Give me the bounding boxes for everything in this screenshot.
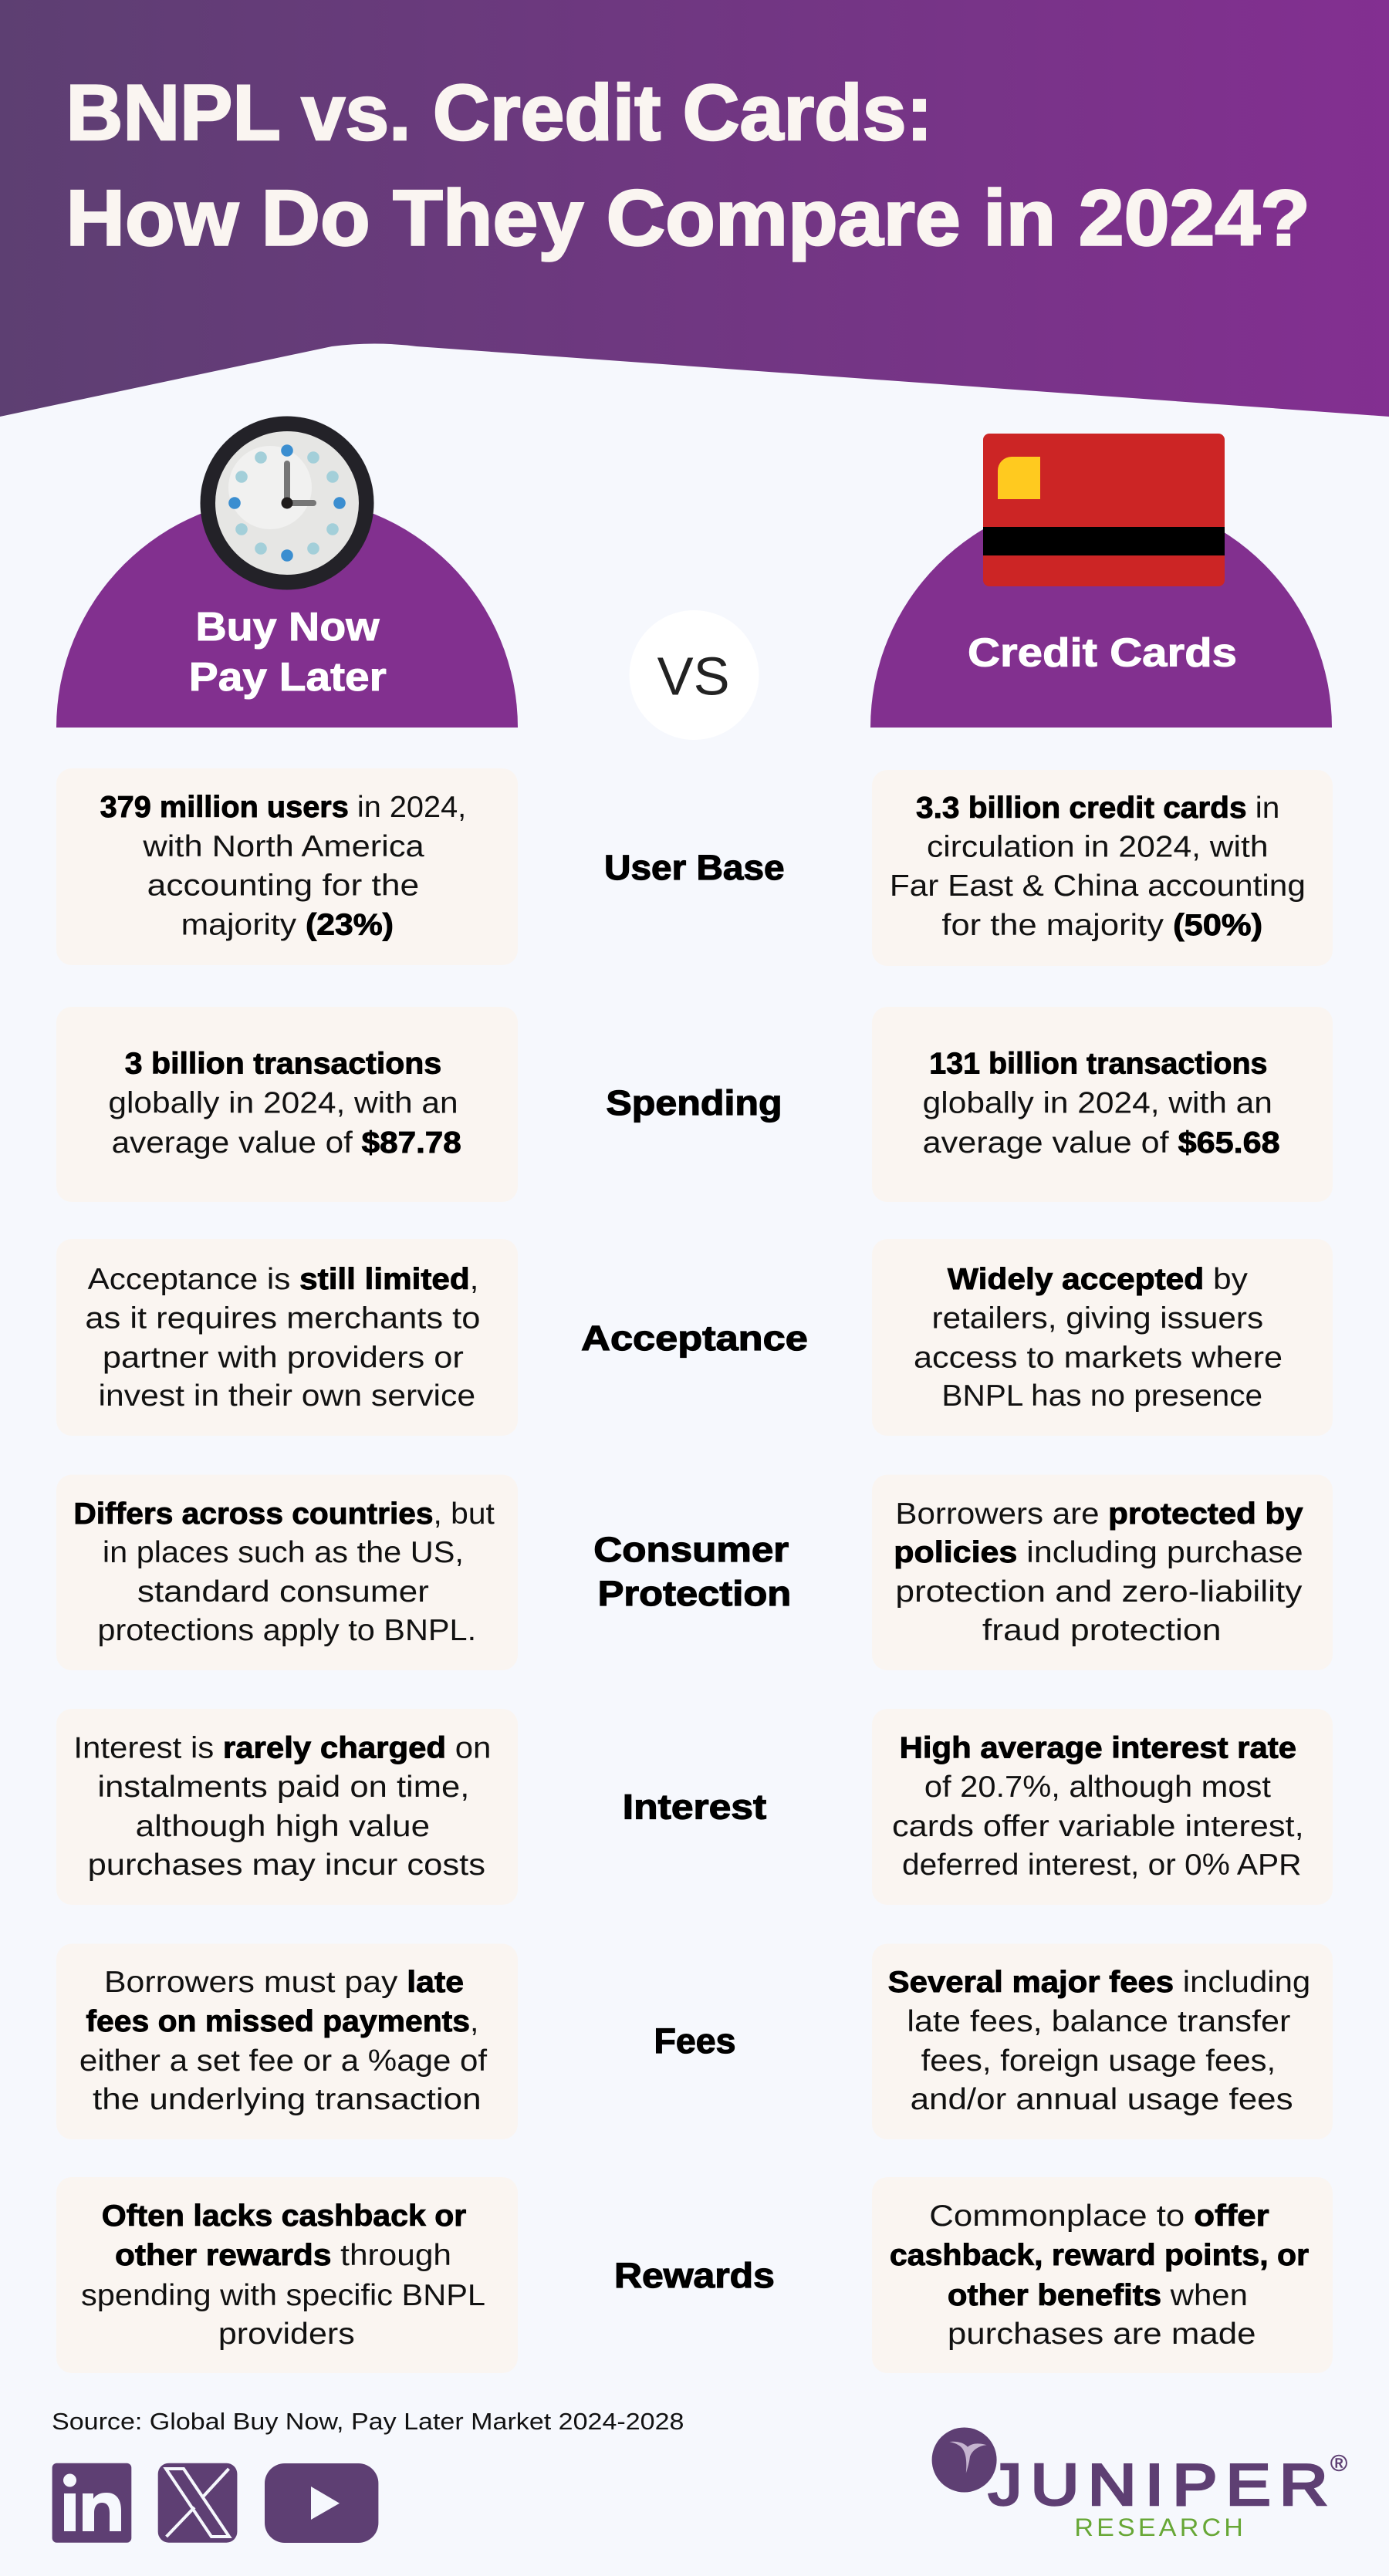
BNPL: interest: instalments paid on time, — [97, 1771, 469, 1804]
BNPL: fees: either a set fee or a %age of — [79, 2044, 487, 2078]
BNPL: acceptance — [56, 1239, 518, 1436]
credit cards: interest: deferred interest, or 0% APR — [902, 1848, 1301, 1882]
BNPL: interest: although high value — [136, 1810, 430, 1843]
row: Consumer Protection — [56, 1475, 1333, 1670]
credit cards: consumer protection: protection and zero-liability — [895, 1575, 1303, 1609]
credit cards: user base — [872, 770, 1333, 966]
credit cards: acceptance: Widely accepted by — [948, 1263, 1248, 1296]
panel: Credit Cards header — [870, 434, 1332, 728]
credit cards: consumer protection: policies including purchase — [894, 1536, 1303, 1569]
credit cards: acceptance: BNPL has no presence — [941, 1379, 1262, 1413]
row: Interest — [56, 1709, 1333, 1905]
logo wordmark: JUNIPER — [989, 2452, 1337, 2517]
panel: Buy Now Pay Later header — [56, 417, 518, 728]
BNPL: consumer protection: standard consumer — [137, 1575, 429, 1609]
row: Acceptance — [56, 1239, 1333, 1436]
icon: credit card — [983, 434, 1225, 586]
credit cards: acceptance: access to markets where — [914, 1341, 1283, 1375]
credit cards: interest: High average interest rate — [900, 1731, 1296, 1764]
BNPL: spending — [56, 1007, 518, 1202]
credit cards: fees: late fees, balance transfer — [907, 2005, 1290, 2038]
credit cards: rewards: other benefits when — [948, 2279, 1248, 2312]
BNPL: fees — [56, 1944, 518, 2139]
BNPL: acceptance: Acceptance is still limited , — [88, 1263, 478, 1296]
credit cards: consumer protection: Borrowers are protected by — [895, 1497, 1303, 1531]
credit cards: fees: and/or annual usage fees — [911, 2083, 1293, 2116]
icon: X — [158, 2463, 237, 2543]
VS badge — [630, 610, 759, 740]
BNPL: consumer protection: Differs across countries , but — [73, 1497, 495, 1531]
credit cards: user base: circulation in 2024, with — [927, 830, 1269, 864]
heading: Credit Cards: Credit Cards — [968, 630, 1237, 675]
BNPL: user base: 379 million users in 2024, — [100, 791, 466, 824]
credit cards: interest — [872, 1709, 1333, 1905]
BNPL: spending: 3 billion transactions — [125, 1047, 441, 1080]
credit cards: rewards: purchases are made — [948, 2318, 1256, 2351]
BNPL: consumer protection: protections apply to BNPL. — [97, 1614, 476, 1647]
icon: YouTube — [265, 2463, 378, 2543]
credit cards: user base: Far East & China accounting — [890, 869, 1306, 903]
credit cards: interest: cards offer variable interest, — [892, 1810, 1304, 1843]
row: User Base — [56, 768, 1333, 966]
icon: clock — [201, 417, 373, 589]
BNPL: user base: with North America — [142, 830, 424, 863]
BNPL: rewards: spending with specific BNPL — [81, 2279, 485, 2312]
BNPL: consumer protection — [56, 1475, 518, 1670]
credit cards: rewards: cashback, reward points, or — [890, 2239, 1309, 2272]
label: Acceptance: Acceptance — [581, 1318, 808, 1358]
heading: Buy Now Pay Later: Buy Now — [196, 605, 380, 650]
header banner — [0, 0, 1389, 417]
credit cards: interest: of 20.7%, although most — [924, 1771, 1271, 1804]
BNPL: acceptance: partner with providers or — [103, 1341, 464, 1375]
credit cards: consumer protection: fraud protection — [982, 1614, 1221, 1647]
logo subtitle: RESEARCH — [1074, 2514, 1246, 2541]
credit cards: user base: 3.3 billion credit cards in — [916, 792, 1279, 825]
label: User Base: User Base — [604, 848, 785, 887]
label: Consumer Protection: Protection — [598, 1574, 791, 1613]
BNPL: interest: Interest is rarely charged on — [73, 1731, 491, 1764]
BNPL: rewards: Often lacks cashback or — [102, 2200, 466, 2233]
credit cards: acceptance: retailers, giving issuers — [932, 1302, 1263, 1335]
label: Consumer Protection: Consumer — [593, 1530, 789, 1569]
credit cards: spending — [872, 1007, 1333, 1202]
heading: Buy Now Pay Later — [189, 605, 387, 700]
credit cards: fees: fees, foreign usage fees, — [921, 2044, 1276, 2078]
credit cards: rewards: Commonplace to offer — [929, 2200, 1269, 2233]
BNPL: interest: purchases may incur costs — [88, 1848, 485, 1882]
label: Consumer Protection — [593, 1530, 791, 1613]
BNPL: interest — [56, 1709, 518, 1905]
BNPL: acceptance: invest in their own service — [99, 1379, 475, 1413]
title: How Do They Compare in 2024? — [66, 174, 1310, 262]
source note: Source: Global Buy Now, Pay Later Market 2024-2028 — [52, 2408, 684, 2435]
row: Rewards — [56, 2177, 1333, 2373]
credit cards: acceptance — [872, 1239, 1333, 1436]
icon: LinkedIn — [52, 2463, 131, 2543]
label: Fees: Fees — [654, 2021, 736, 2061]
credit cards: rewards — [872, 2177, 1333, 2373]
BNPL: user base: accounting for the — [147, 869, 419, 903]
BNPL: fees: Borrowers must pay late — [104, 1966, 464, 1999]
BNPL: user base: majority (23%) — [181, 909, 394, 941]
logo mark — [932, 2427, 997, 2492]
BNPL: acceptance: as it requires merchants to — [85, 1302, 480, 1335]
BNPL: spending: average value of $87.78 — [112, 1126, 461, 1160]
VS badge: VS — [657, 647, 730, 707]
BNPL: spending: globally in 2024, with an — [108, 1086, 458, 1120]
row: Spending — [56, 1007, 1333, 1202]
title: BNPL vs. Credit Cards: — [66, 69, 932, 157]
credit cards: user base: for the majority (50%) — [941, 909, 1262, 942]
BNPL: rewards: other rewards through — [115, 2239, 451, 2272]
row: Fees — [56, 1944, 1333, 2139]
label: Spending: Spending — [606, 1083, 782, 1123]
title — [66, 69, 1310, 262]
BNPL: consumer protection: in places such as the US, — [103, 1536, 464, 1569]
credit cards: spending: 131 billion transactions — [929, 1047, 1268, 1080]
label: Rewards: Rewards — [614, 2256, 775, 2295]
BNPL: fees: fees on missed payments , — [86, 2005, 478, 2038]
credit cards: fees: Several major fees including — [888, 1966, 1310, 1999]
BNPL: user base — [56, 768, 518, 965]
label: Interest: Interest — [623, 1788, 766, 1827]
credit cards: spending: average value of $65.68 — [923, 1126, 1280, 1160]
logo: Juniper Research — [932, 2427, 1347, 2541]
registered mark: ® — [1330, 2451, 1347, 2476]
BNPL: rewards — [56, 2177, 518, 2373]
credit cards: spending: globally in 2024, with an — [923, 1086, 1272, 1120]
credit cards: fees — [872, 1944, 1333, 2139]
BNPL: rewards: providers — [218, 2318, 355, 2351]
heading: Buy Now Pay Later: Pay Later — [189, 655, 387, 700]
credit cards: consumer protection — [872, 1475, 1333, 1670]
BNPL: fees: the underlying transaction — [93, 2083, 482, 2116]
